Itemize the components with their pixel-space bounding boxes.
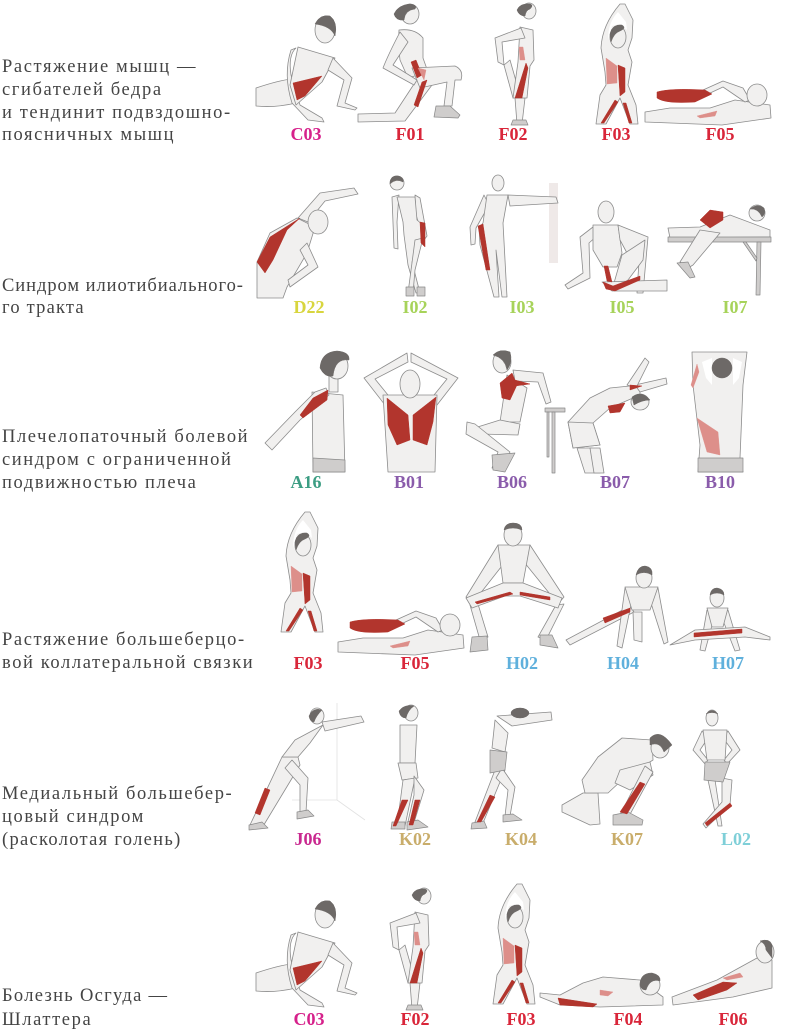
figure: H07 stretch	[670, 588, 770, 651]
figure: D22 stretch	[257, 188, 358, 298]
code label B01: B01	[394, 472, 424, 492]
heading: shoulder pain syndrome: синдром с ограниченной	[2, 450, 233, 470]
code label F04: F04	[614, 1009, 642, 1029]
code label H02: H02	[506, 653, 538, 673]
figure: F05 stretch repeated	[338, 611, 464, 655]
figure: F04 stretch	[540, 973, 663, 1007]
code label L02: L02	[721, 829, 751, 849]
code label C03: C03	[290, 124, 322, 144]
figure: K02 stretch	[391, 705, 428, 830]
figure: F03 stretch repeated	[493, 884, 535, 1004]
code label F02: F02	[498, 124, 528, 144]
figure: B01 stretch	[364, 353, 458, 472]
figure: F02 stretch	[495, 3, 536, 125]
heading: medial tibial stress syndrome: цовый синдром	[2, 807, 145, 827]
code label F05: F05	[400, 653, 430, 673]
heading: Osgood-Schlatter disease: Болезнь Осгуда —	[2, 986, 168, 1006]
figure: F06 stretch	[672, 940, 774, 1005]
figure: H04 stretch	[566, 566, 668, 648]
code label B10: B10	[705, 472, 735, 492]
figure: F02 stretch repeated	[390, 888, 431, 1010]
code label I02: I02	[402, 297, 428, 317]
panel: row 3 shoulder pain syndrome	[2, 351, 747, 493]
heading: medial tibial stress syndrome: (расколотая голень)	[2, 830, 182, 850]
code label A16: A16	[290, 472, 322, 492]
figure: I03 stretch	[470, 175, 558, 297]
heading: tibial collateral ligament strain: вой коллатеральной связки	[2, 653, 254, 673]
figure: B06 stretch	[466, 351, 565, 473]
panel: row 6 Osgood-Schlatter disease	[2, 884, 774, 1030]
panel: row 5 medial tibial stress syndrome	[2, 703, 751, 850]
heading: hip flexor strain: поясничных мышц	[2, 125, 175, 145]
figure: H02 stretch	[466, 523, 564, 652]
code label K07: K07	[611, 829, 643, 849]
heading: tibial collateral ligament strain: Растяжение большеберцо-	[2, 630, 246, 650]
code label F05: F05	[706, 124, 734, 144]
figure: J06 stretch	[249, 703, 365, 830]
figure: C03 stretch repeated	[256, 901, 357, 1007]
panel: row 2 iliotibial band syndrome	[2, 175, 771, 318]
figure: B07 stretch	[568, 358, 667, 473]
panel: row 4 tibial collateral ligament strain	[2, 512, 770, 673]
figure: F01 stretch	[358, 4, 462, 122]
code label I07: I07	[722, 297, 748, 317]
code label F06: F06	[718, 1009, 748, 1029]
heading: shoulder pain syndrome: Плечелопаточный болевой	[2, 427, 249, 447]
code label B07: B07	[600, 472, 630, 492]
heading: medial tibial stress syndrome: Медиальный большебер-	[2, 784, 233, 804]
code label F03: F03	[602, 124, 630, 144]
figure: F05 stretch	[645, 81, 771, 125]
figure: I02 stretch	[390, 176, 427, 296]
code label F01: F01	[396, 124, 424, 144]
figure: L02 stretch	[693, 710, 740, 828]
heading: hip flexor strain: и тендинит подвздошно-	[2, 103, 232, 123]
figure: K07 stretch	[562, 734, 672, 825]
heading: iliotibial band syndrome: го тракта	[2, 298, 85, 318]
figure: I07 stretch	[668, 205, 771, 295]
figure: K04 stretch	[471, 708, 552, 829]
heading: Osgood-Schlatter disease: Шлаттера	[2, 1010, 92, 1030]
figure: I05 stretch	[565, 201, 667, 293]
code label B06: B06	[497, 472, 527, 492]
panel: row 1 hip flexor strain	[2, 3, 771, 145]
code label J06: J06	[294, 829, 322, 849]
code label K04: K04	[505, 829, 537, 849]
code label H07: H07	[712, 653, 744, 673]
code label F03: F03	[294, 653, 322, 673]
code label D22: D22	[294, 297, 324, 317]
code label F03: F03	[506, 1009, 536, 1029]
heading: hip flexor strain: сгибателей бедра	[2, 80, 163, 100]
figure: F03 stretch repeated	[281, 512, 323, 632]
code label K02: K02	[399, 829, 431, 849]
figure: B10 stretch	[691, 352, 747, 472]
heading: hip flexor strain: Растяжение мышц —	[2, 57, 197, 77]
heading: iliotibial band syndrome: Синдром илиотибиального-	[2, 276, 244, 296]
code label I05: I05	[609, 297, 635, 317]
figure: F03 stretch	[596, 4, 638, 124]
heading: shoulder pain syndrome: подвижностью плеча	[2, 473, 197, 493]
code label I03: I03	[509, 297, 535, 317]
code label C03: C03	[294, 1009, 324, 1029]
figure: A16 stretch	[265, 351, 349, 472]
code label F02: F02	[400, 1009, 430, 1029]
code label H04: H04	[607, 653, 639, 673]
figure: C03 stretch	[256, 16, 357, 122]
